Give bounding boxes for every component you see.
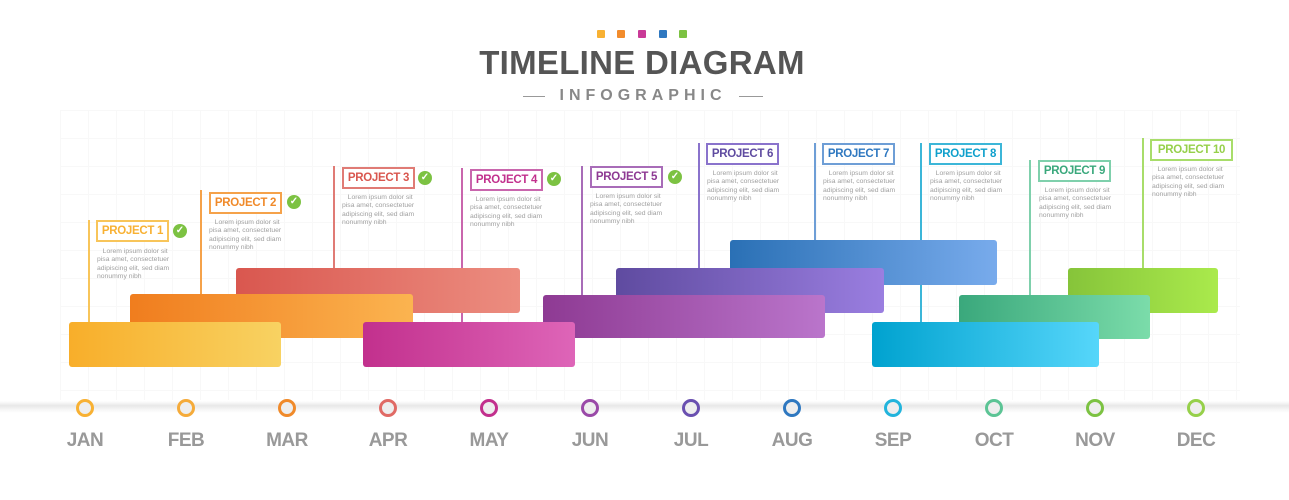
title: TIMELINE DIAGRAM (479, 44, 805, 81)
month axis: FEB (168, 430, 204, 451)
bar: project 3 (236, 268, 520, 313)
bar: project 9 (959, 295, 1150, 339)
icon: check 4: ✓ (550, 173, 558, 184)
background grid (60, 110, 1240, 400)
bars (88, 220, 90, 322)
text 1: Lorem ipsum dolor sit pisa amet, consectetuer adipiscing elit, sed diam nonummy nibh (97, 248, 169, 280)
icon: check 3: ✓ (421, 172, 429, 183)
color dots (597, 30, 687, 38)
label: project 4 (470, 169, 543, 191)
icon: check 5 (668, 170, 682, 184)
icon: check 2 (287, 195, 301, 209)
label: project 9 (1038, 160, 1111, 182)
label: project 3: PROJECT 3 (348, 172, 409, 184)
bar: project 10 (1068, 268, 1218, 313)
month axis: DEC (1177, 430, 1215, 451)
label: project 2 (209, 192, 282, 214)
icon: check 2: ✓ (290, 196, 298, 207)
month axis: JUN (572, 430, 608, 451)
bar: project 5 (543, 295, 825, 338)
text 7: Lorem ipsum dolor sit pisa amet, consectetuer adipiscing elit, sed diam nonummy nibh (823, 170, 895, 202)
month axis: SEP (875, 430, 911, 451)
label: project 1: PROJECT 1 (102, 225, 163, 237)
label: project 7: PROJECT 7 (828, 148, 889, 160)
bar: project 2 (130, 294, 413, 338)
text 9: Lorem ipsum dolor sit pisa amet, consectetuer adipiscing elit, sed diam nonummy nibh (1039, 187, 1111, 219)
text 6: Lorem ipsum dolor sit pisa amet, consectetuer adipiscing elit, sed diam nonummy nibh (707, 170, 779, 202)
month axis: NOV (1075, 430, 1115, 451)
text 3: Lorem ipsum dolor sit pisa amet, consectetuer adipiscing elit, sed diam nonummy nibh (342, 194, 414, 226)
header (479, 30, 805, 104)
subtitle: INFOGRAPHIC (560, 87, 726, 104)
month axis: JAN (67, 430, 103, 451)
bar: project 8 (872, 322, 1099, 367)
label: project 6 (706, 143, 779, 165)
text 5: Lorem ipsum dolor sit pisa amet, consectetuer adipiscing elit, sed diam nonummy nibh (590, 193, 662, 225)
bar: project 4 (363, 322, 575, 367)
month axis: AUG (772, 430, 812, 451)
label: project 3 (342, 167, 415, 189)
label: project 2: PROJECT 2 (215, 197, 276, 209)
icon: check 4 (547, 172, 561, 186)
label: project 10: PROJECT 10 (1158, 144, 1225, 156)
label: project 1 (96, 220, 169, 242)
label: project 5: PROJECT 5 (596, 171, 657, 183)
text 10: Lorem ipsum dolor sit pisa amet, consectetuer adipiscing elit, sed diam nonummy nibh (1152, 166, 1224, 198)
label: project 4: PROJECT 4 (476, 174, 537, 186)
text 4: Lorem ipsum dolor sit pisa amet, consectetuer adipiscing elit, sed diam nonummy nibh (470, 196, 542, 228)
bar: project 6 (616, 268, 884, 313)
label: project 10 (1150, 139, 1233, 161)
icon: check 1: ✓ (176, 225, 184, 236)
month axis: APR (369, 430, 407, 451)
bar: project 1 (69, 322, 281, 367)
text 2: Lorem ipsum dolor sit pisa amet, consectetuer adipiscing elit, sed diam nonummy nibh (209, 219, 281, 251)
icon: check 3 (418, 171, 432, 185)
text 8: Lorem ipsum dolor sit pisa amet, consectetuer adipiscing elit, sed diam nonummy nibh (930, 170, 1002, 202)
icon: check 1 (173, 224, 187, 238)
month axis: OCT (975, 430, 1013, 451)
label: project 8: PROJECT 8 (935, 148, 996, 160)
label: project 7 (822, 143, 895, 165)
timeline shadow band (0, 401, 1289, 413)
label: project 9: PROJECT 9 (1044, 165, 1105, 177)
label: project 5 (590, 166, 663, 188)
month axis: MAY (470, 430, 508, 451)
label: project 8 (929, 143, 1002, 165)
label: project 6: PROJECT 6 (712, 148, 773, 160)
bar: project 7 (730, 240, 997, 285)
month axis: JUL (674, 430, 708, 451)
month axis (67, 399, 1216, 451)
month axis: MAR (266, 430, 308, 451)
icon: check 5: ✓ (671, 171, 679, 182)
